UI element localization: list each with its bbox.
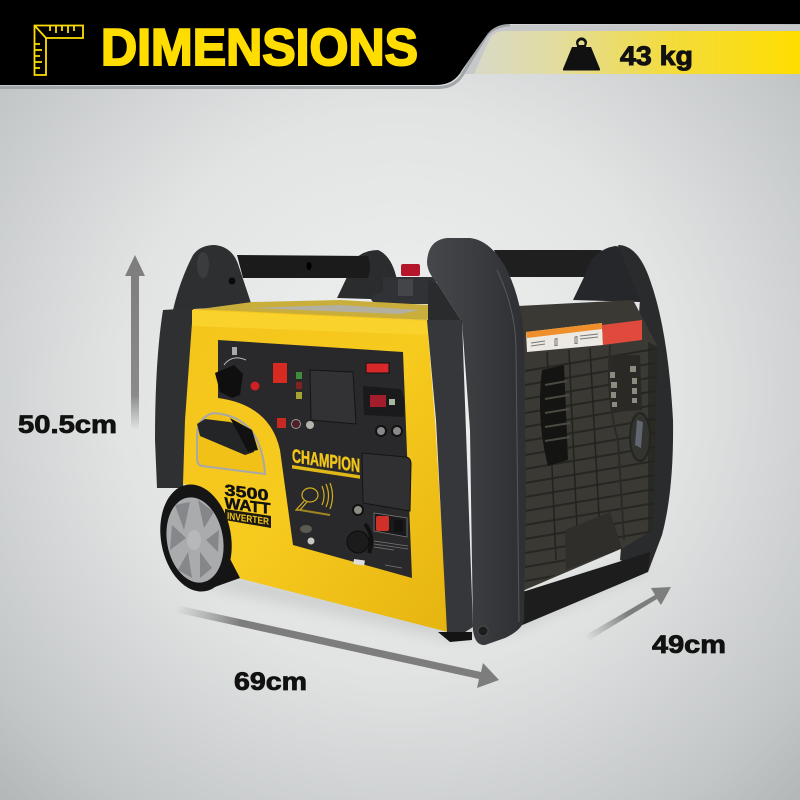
USB sockets: [376, 426, 402, 436]
wireless remote logo: [296, 483, 332, 515]
arrow: depth: [584, 587, 671, 641]
control panel: [215, 340, 412, 578]
lower outlet cover: [362, 453, 411, 511]
fuel dial: [215, 347, 246, 398]
weight value: 43 kg: [620, 41, 693, 71]
indicator sockets: [292, 420, 314, 429]
model badge: [224, 482, 271, 528]
parallel sockets: [374, 513, 407, 537]
fuel cap: [371, 264, 436, 304]
label: height: 50.5cm: [18, 411, 117, 439]
model badge: WATT: [224, 495, 271, 518]
bottom tray: [516, 552, 650, 626]
red reset button: [277, 418, 286, 428]
icon: set square ruler: [34, 26, 83, 75]
fuse: [300, 525, 314, 544]
header banner: [0, 0, 800, 88]
front handle posts and bar: [173, 245, 400, 310]
lower foot moulding: [565, 512, 622, 570]
rear grille panel: [508, 300, 660, 592]
ground shadow: [200, 560, 650, 640]
red rocker switch: [273, 363, 287, 383]
wheel spokes: [170, 500, 219, 578]
front foot: [438, 632, 472, 642]
weight band: [456, 25, 800, 74]
label: depth: 49cm: [652, 631, 726, 659]
mini switch: [366, 363, 389, 373]
warning stickers: [526, 320, 642, 352]
dark corner panel: [427, 320, 473, 634]
rear handle: [494, 246, 643, 302]
model badge: 3500: [224, 482, 269, 505]
status LEDs: [296, 372, 302, 399]
grille slats: [525, 340, 660, 581]
left dark side: [155, 308, 195, 488]
big front frame: [427, 238, 526, 645]
top surface: [193, 300, 435, 320]
red engine button: [250, 382, 260, 390]
grille oval latch: [630, 413, 650, 461]
arrow: height: [125, 255, 145, 430]
small fine print: [374, 541, 408, 568]
Champion logo: CHAMPION: [292, 446, 360, 477]
rear outer frame: [618, 245, 673, 572]
arrow: width: [174, 605, 499, 688]
black header shape: [0, 25, 510, 88]
12V socket: [347, 524, 371, 553]
label: width: 69cm: [234, 668, 307, 696]
wheel: [152, 479, 240, 597]
yellow body: [183, 309, 448, 632]
Champion logo: [292, 446, 361, 479]
icon: weight: [563, 37, 600, 70]
outlet cover top: [310, 370, 356, 424]
model badge: INVERTER: [227, 511, 270, 528]
display unit: [363, 386, 404, 417]
DC socket: [353, 505, 363, 515]
title: DIMENSIONS: [101, 19, 418, 77]
generator: [152, 238, 673, 645]
carry handle recess: [197, 413, 265, 474]
